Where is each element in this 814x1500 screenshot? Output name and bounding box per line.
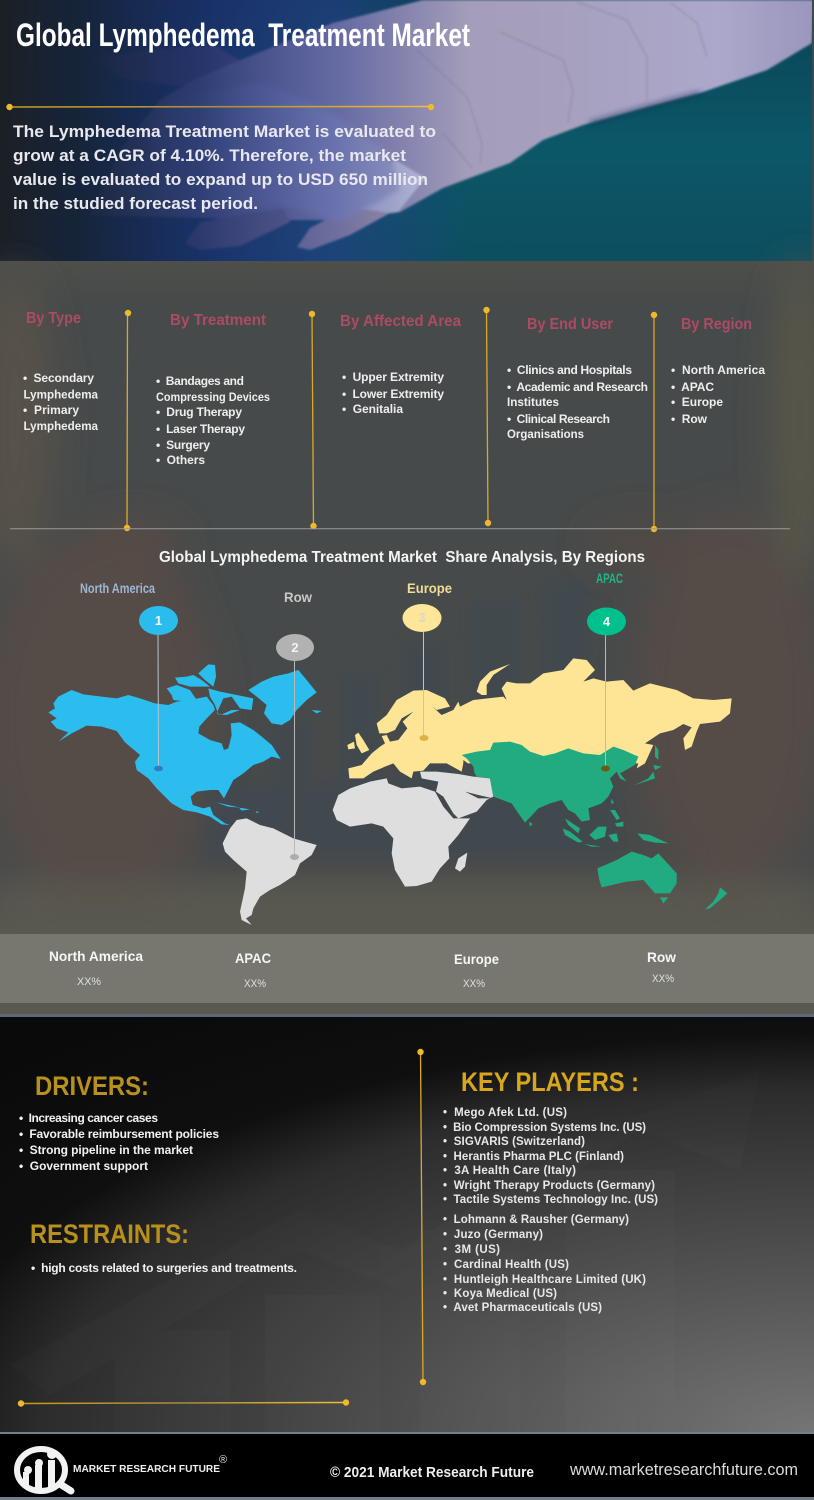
segment list: By End User: • Clinical Research (507, 412, 610, 426)
segment heading: By Region: By Region (681, 316, 752, 333)
gold divider vertical centre (417, 1049, 426, 1385)
segment list: By End User: Organisations (507, 427, 584, 441)
map label: Row: Row (284, 589, 312, 605)
share: Europe (454, 951, 499, 990)
list: drivers: • Increasing cancer cases (19, 1111, 158, 1125)
list: key players (443, 1107, 658, 1314)
map label: APAC: APAC (596, 570, 623, 586)
share: Row: Row (647, 949, 676, 965)
segment list: By Region (671, 363, 765, 426)
list: key players: • Juzo (Germany) (443, 1229, 543, 1241)
heading: key players: KEY PLAYERS : (461, 1067, 639, 1097)
share: Europe: XX% (463, 978, 485, 990)
marker 2: Row (276, 634, 314, 860)
segment list: By Affected Area (342, 370, 444, 416)
background arrow motif (10, 1070, 760, 1433)
background photo: blurred hands and chart (0, 260, 814, 930)
segment list: By Affected Area: • Upper Extremity (342, 370, 444, 384)
segment heading: By Treatment: By Treatment (170, 312, 267, 329)
list: key players: • Mego Afek Ltd. (US) (443, 1107, 567, 1119)
intro paragraph: grow at a CAGR of 4.10%. Therefore, the market (13, 146, 406, 165)
list: key players: • Herantis Pharma PLC (Finland) (443, 1151, 624, 1163)
hero banner (0, 0, 814, 261)
registered mark: ® (219, 1454, 227, 1466)
segment list: By Affected Area: • Genitalia (342, 402, 403, 416)
vertical divider 1 (124, 310, 131, 531)
footer (0, 1432, 814, 1500)
vertical divider 4 (651, 312, 657, 532)
segment list: By Affected Area: • Lower Extremity (342, 387, 444, 401)
share: Row (647, 949, 676, 985)
copyright: © 2021 Market Research Future (330, 1464, 534, 1481)
segment list: By Type (23, 371, 98, 433)
panel: drivers, restraints and key players (0, 1017, 814, 1433)
segment list: By Region: • Europe (671, 395, 723, 409)
intro paragraph: in the studied forecast period. (13, 194, 258, 213)
segment list: By Treatment: • Laser Therapy (156, 422, 245, 436)
intro paragraph: value is evaluated to expand up to USD 650 million (13, 170, 428, 189)
segment list: By Region: • Row (671, 412, 708, 426)
map region: North America (48, 664, 322, 825)
map region: South America (223, 818, 317, 925)
list: key players: • Avet Pharmaceuticals (US) (443, 1302, 602, 1314)
heading: drivers: DRIVERS: (35, 1071, 149, 1101)
map region: Africa and Middle East (333, 772, 493, 887)
share: APAC: XX% (244, 978, 266, 990)
list: drivers: • Strong pipeline in the market (19, 1143, 193, 1157)
map region: APAC (462, 742, 727, 909)
segment list: By Treatment: • Drug Therapy (156, 405, 242, 419)
segment list: By End User: • Clinics and Hospitals (507, 363, 632, 377)
panel: segmentation and regional map background (0, 260, 814, 935)
list: key players: • Wright Therapy Products (Germany) (443, 1180, 655, 1192)
marker 4: APAC: 4 (603, 614, 611, 629)
marker 3: Europe (402, 604, 442, 741)
marker 2: Row: 2 (291, 640, 299, 655)
marker 4: APAC (587, 608, 626, 772)
segment heading: By Affected Area: By Affected Area (340, 313, 461, 330)
heading: restraints: RESTRAINTS: (30, 1219, 189, 1249)
share: APAC: APAC (235, 950, 271, 966)
share: Europe: Europe (454, 951, 499, 967)
list: drivers (19, 1111, 219, 1173)
list: key players: • Tactile Systems Technology Inc. (US) (443, 1194, 658, 1206)
hero photo: bandaged arm (90, 0, 814, 250)
gold divider (6, 104, 434, 110)
share: North America (49, 948, 143, 988)
world map (48, 658, 732, 925)
segment list: By Treatment (156, 374, 270, 467)
list: key players: • 3A Health Care (Italy) (443, 1165, 576, 1177)
map heading: Global Lymphedema Treatment Market Share Analysis, By Regions (159, 549, 645, 566)
list: key players: • Cardinal Health (US) (443, 1259, 569, 1271)
share: North America: XX% (77, 976, 101, 988)
list: key players: • Bio Compression Systems Inc. (US) (443, 1122, 646, 1134)
list: restraints: • high costs related to surgeries and treatments. (31, 1261, 297, 1275)
map label: Europe: Europe (407, 580, 452, 596)
segment list: By Type: • Primary (23, 403, 79, 417)
segment list: By End User: • Academic and Research (507, 380, 648, 394)
website: www.marketresearchfuture.com (569, 1461, 798, 1479)
marker 1: North America (139, 606, 178, 771)
panel: regional share table (0, 934, 814, 1017)
list: drivers: • Favorable reimbursement policies (19, 1127, 219, 1141)
map label: North America: North America (80, 580, 155, 596)
intro paragraph (13, 122, 436, 213)
segment list: By Treatment: Compressing Devices (156, 390, 270, 404)
map region: Europe and Russia (347, 658, 732, 778)
list: key players: • SIGVARIS (Switzerland) (443, 1136, 585, 1148)
list: drivers: • Government support (19, 1159, 148, 1173)
list: key players: • Koya Medical (US) (443, 1288, 557, 1300)
list: key players: • 3M (US) (443, 1244, 500, 1256)
list: key players: • Lohmann & Rausher (Germany) (443, 1214, 629, 1226)
segment list: By Treatment: • Surgery (156, 438, 210, 452)
vertical divider 3 (483, 307, 491, 526)
marker 3: Europe: 3 (418, 610, 426, 625)
segment heading: By End User: By End User (527, 316, 613, 333)
list: key players: • Huntleigh Healthcare Limited (UK) (443, 1274, 646, 1286)
segment list: By End User: Institutes (507, 395, 559, 409)
segment list: By Treatment: • Bandages and (156, 374, 244, 388)
segment list: By Type: Lymphedema (24, 388, 98, 402)
marker 1: North America: 1 (155, 613, 162, 628)
icon: market research future logo (17, 1449, 71, 1491)
share: Row: XX% (652, 973, 674, 985)
share: North America: North America (49, 948, 143, 964)
intro paragraph: The Lymphedema Treatment Market is evaluated to (13, 122, 436, 141)
gold divider bottom left (18, 1399, 349, 1407)
segment list: By Treatment: • Others (156, 453, 205, 467)
segment list: By End User (507, 363, 648, 441)
segment list: By Region: • North America (671, 363, 765, 377)
segment list: By Type: • Secondary (23, 371, 94, 385)
segment heading: By Type: By Type (26, 310, 81, 327)
segment list: By Region: • APAC (671, 380, 714, 394)
title: Global Lymphedema Treatment Market (16, 17, 470, 53)
vertical divider 2 (309, 311, 317, 529)
share: APAC (235, 950, 271, 990)
segment list: By Type: Lymphedema (24, 419, 98, 433)
logo wordmark: MARKET RESEARCH FUTURE (73, 1464, 220, 1475)
